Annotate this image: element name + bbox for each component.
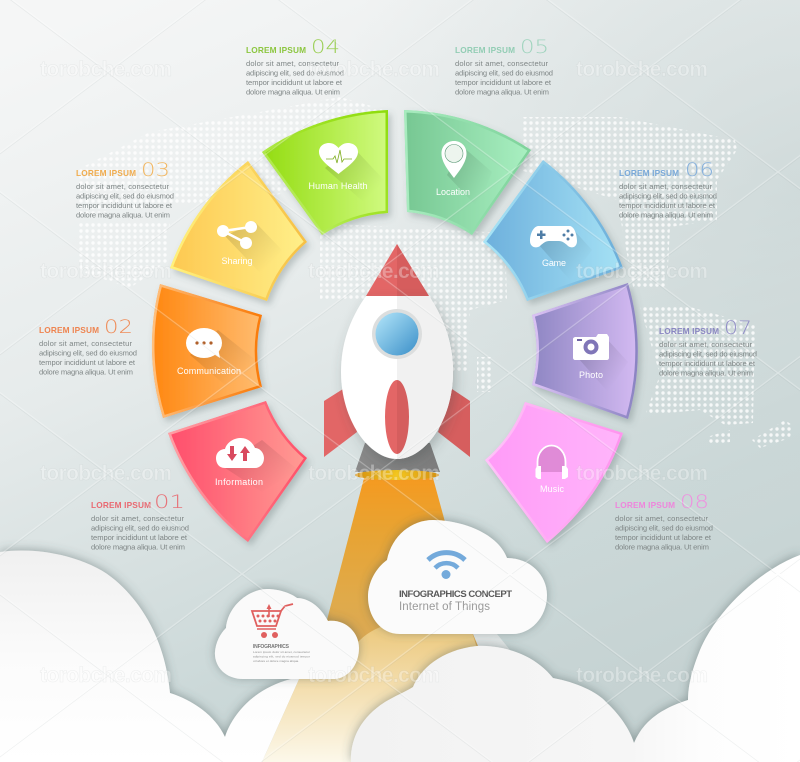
text block 03: tempor incididunt ut labore et	[76, 201, 173, 210]
label: Human Health	[308, 181, 368, 191]
text block 04: LOREM IPSUM	[246, 45, 306, 55]
icon: heart with pulse	[319, 143, 384, 206]
text block 08: LOREM IPSUM	[615, 500, 675, 510]
watermarks: torobche.com	[576, 664, 708, 687]
text block 01: adipiscing elit, sed do eiusmod	[91, 524, 189, 532]
rocket left fin	[324, 389, 357, 457]
rocket right fin	[438, 389, 470, 457]
icon: map pin	[442, 141, 492, 208]
small cloud text	[253, 644, 310, 663]
text block 06: dolore magna aliqua. Ut enim	[619, 210, 713, 220]
text block 02: dolor sit amet, consectetur	[39, 339, 132, 348]
icon: wifi	[428, 553, 465, 579]
text block 02: tempor incididunt ut labore et	[39, 358, 136, 367]
text block 03: adipiscing elit, sed do eiusmod	[76, 192, 174, 200]
icon: cloud arrows	[216, 438, 298, 492]
text block 01: LOREM IPSUM	[91, 500, 151, 510]
text block 02: adipiscing elit, sed do eiusmod	[39, 348, 137, 358]
text block 03: dolore magna aliqua. Ut enim	[76, 210, 170, 220]
rocket oval	[385, 380, 409, 454]
text block 03: dolor sit amet, consectetur	[76, 182, 169, 191]
text block 02	[39, 316, 137, 376]
text block 07: dolor sit amet, consectetur	[659, 340, 752, 349]
text block 06	[619, 159, 717, 220]
big cloud heading: INFOGRAPHICS CONCEPT	[399, 589, 512, 600]
text block 03: LOREM IPSUM	[76, 168, 136, 178]
text block 04: tempor incididunt ut labore et	[246, 78, 343, 87]
icon: share	[217, 221, 282, 275]
text block 08: 08	[680, 491, 709, 513]
text block 05	[455, 36, 553, 96]
small cloud text: adipiscing elit, sed do eiusmod tempor	[253, 654, 310, 658]
watermarks: torobche.com	[308, 58, 440, 81]
text block 04: adipiscing elit, sed do eiusmod	[246, 68, 344, 78]
text block 01: tempor incididunt ut labore et	[91, 533, 188, 542]
segment 08: Music	[485, 402, 623, 543]
watermarks: torobche.com	[576, 260, 708, 283]
text block 04: dolor sit amet, consectetur	[246, 59, 339, 68]
label: Location	[436, 187, 470, 197]
rocket body	[341, 296, 453, 459]
text block 05: adipiscing elit, sed do eiusmod	[455, 68, 553, 78]
text block 05: tempor incididunt ut labore et	[455, 78, 552, 87]
text block 01: 01	[154, 491, 185, 513]
watermarks: torobche.com	[40, 260, 172, 283]
text block 08: dolor sit amet, consectetur	[615, 514, 708, 523]
rocket window	[372, 309, 422, 359]
text block 08	[615, 491, 713, 552]
text block 08: tempor incididunt ut labore et	[615, 533, 712, 542]
label: Game	[542, 258, 566, 268]
icon: game controller	[530, 226, 592, 280]
text block 07: 07	[724, 317, 752, 339]
text block 06: dolor sit amet, consectetur	[619, 182, 712, 191]
watermarks	[40, 58, 708, 687]
text block 08: adipiscing elit, sed do eiusmod	[615, 524, 713, 532]
center and right bottom clouds	[351, 555, 800, 762]
text block 07: LOREM IPSUM	[659, 326, 719, 336]
watermarks: torobche.com	[576, 462, 708, 485]
text block 08: dolore magna aliqua. Ut enim	[615, 542, 709, 552]
text block 05: 05	[520, 36, 549, 58]
watermarks: torobche.com	[40, 664, 172, 687]
text block 06: LOREM IPSUM	[619, 168, 679, 178]
segment 04: Human Health	[262, 110, 388, 235]
label: Photo	[579, 370, 603, 380]
segment 05: Location	[404, 110, 531, 235]
label: Music	[540, 484, 564, 494]
text block 06: tempor incididunt ut labore et	[619, 201, 716, 210]
watermarks: torobche.com	[308, 260, 440, 283]
icon: headphones	[536, 446, 568, 479]
watermarks: torobche.com	[576, 58, 708, 81]
text block 07: adipiscing elit, sed do eiusmod	[659, 350, 757, 358]
text block 02: LOREM IPSUM	[39, 325, 99, 335]
small cloud text: ut labore et dolore magna aliqua.	[253, 659, 299, 663]
segment 02: Communication	[152, 284, 262, 418]
icon: camera	[573, 334, 628, 392]
world map dots	[80, 98, 791, 448]
small cloud text: INFOGRAPHICS	[253, 644, 290, 650]
small cloud	[215, 589, 359, 679]
big cloud subtitle: Internet of Things	[399, 601, 490, 613]
text block 01: dolor sit amet, consectetur	[91, 514, 184, 523]
text block 04: dolore magna aliqua. Ut enim	[246, 88, 340, 96]
text block 01: dolore magna aliqua. Ut enim	[91, 542, 185, 552]
text block 01	[91, 491, 189, 552]
segment 03: Sharing	[170, 161, 307, 301]
text block 05: dolore magna aliqua. Ut enim	[455, 88, 549, 96]
segment 01: Information	[168, 401, 307, 542]
text block 05: dolor sit amet, consectetur	[455, 59, 548, 68]
text block 06: 06	[685, 159, 714, 181]
text block 04	[246, 36, 344, 96]
watermarks: torobche.com	[40, 58, 172, 81]
segment 07: Photo	[532, 283, 638, 419]
watermarks: torobche.com	[308, 462, 440, 485]
segment 06: Game	[483, 160, 623, 301]
icon: speech bubble	[186, 328, 258, 385]
text block 07: dolore magna aliqua. Ut enim	[659, 368, 753, 378]
small cloud text: Lorem ipsum dolor sit amet, consectetur	[253, 650, 310, 654]
rocket	[324, 244, 470, 480]
text block 07	[659, 317, 757, 378]
text block 04: 04	[311, 36, 340, 58]
text block 02: dolore magna aliqua. Ut enim	[39, 368, 133, 376]
rocket nose	[366, 244, 429, 296]
label: Communication	[177, 366, 241, 376]
lower exhaust beam	[262, 625, 520, 762]
text block 06: adipiscing elit, sed do eiusmod	[619, 192, 717, 200]
text block 05: LOREM IPSUM	[455, 45, 515, 55]
text block 07: tempor incididunt ut labore et	[659, 359, 756, 368]
watermarks: torobche.com	[308, 664, 440, 687]
watermarks: torobche.com	[40, 462, 172, 485]
rocket exhaust beam	[327, 478, 480, 650]
big cloud	[368, 520, 547, 634]
rocket nozzle	[355, 443, 440, 472]
label: Sharing	[222, 256, 252, 266]
text block 03	[76, 159, 174, 220]
left bottom cloud	[0, 550, 300, 762]
rocket nozzle ring	[355, 470, 439, 480]
text block 02: 02	[104, 316, 133, 338]
text block 03: 03	[141, 159, 170, 181]
icon: shopping cart	[252, 604, 293, 638]
label: Information	[215, 477, 263, 487]
